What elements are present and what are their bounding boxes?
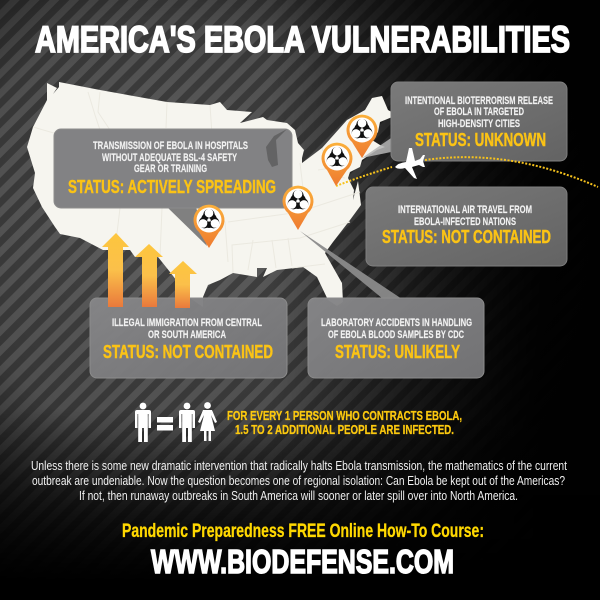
flight path and plane bbox=[336, 148, 598, 187]
panel: laboratory accidents: STATUS: UNLIKELY bbox=[335, 341, 460, 362]
panel: illegal immigration bbox=[90, 298, 287, 378]
panel: hospitals transmission: STATUS: ACTIVELY SPREADING bbox=[68, 176, 276, 197]
panel: hospitals transmission: TRANSMISSION OF EBOLA IN HOSPITALS bbox=[93, 140, 248, 152]
panel: illegal immigration: ILLEGAL IMMIGRATION FROM CENTRAL bbox=[112, 317, 262, 329]
icon: pin Texas bbox=[194, 205, 224, 248]
text block: course promo: Pandemic Preparedness FREE Online How-To Course: bbox=[122, 521, 484, 542]
text block: website: WWW.BIODEFENSE.COM bbox=[151, 543, 454, 580]
callout: transmission rate: FOR EVERY 1 PERSON WHO CONTRACTS EBOLA, bbox=[227, 408, 462, 423]
panel: laboratory accidents: OF EBOLA BLOOD SAMPLES BY CDC bbox=[328, 329, 464, 341]
icon: pin New York bbox=[346, 115, 378, 158]
panel: bioterrorism tail bbox=[362, 138, 391, 158]
callout: transmission rate bbox=[227, 408, 462, 437]
icon: person equals two people bbox=[135, 402, 217, 442]
icon: pin Washington bbox=[321, 143, 352, 186]
panel: hospitals transmission: WITHOUT ADEQUATE BSL-4 SAFETY bbox=[102, 152, 237, 164]
panel: hospitals transmission bbox=[54, 129, 292, 246]
callout: transmission rate: 1.5 TO 2 ADDITIONAL PEOPLE ARE INFECTED. bbox=[235, 422, 454, 437]
panel: laboratory accidents bbox=[300, 231, 484, 378]
text block: explanation bbox=[31, 458, 567, 503]
panel: air travel bbox=[366, 187, 567, 266]
panel: illegal immigration: STATUS: NOT CONTAINED bbox=[103, 341, 273, 362]
panel: bioterrorism release: STATUS: UNKNOWN bbox=[415, 129, 546, 150]
panel: laboratory accidents: LABORATORY ACCIDENTS IN HANDLING bbox=[321, 317, 472, 329]
panel: air travel: INTERNATIONAL AIR TRAVEL FROM bbox=[398, 204, 532, 216]
panel: hospitals transmission: GEAR OR TRAINING bbox=[134, 163, 207, 175]
map of the United States bbox=[27, 82, 397, 307]
panel: air travel: EBOLA-INFECTED NATIONS bbox=[414, 216, 516, 228]
arrows: immigration from the south bbox=[102, 233, 197, 308]
panel: illegal immigration: OR SOUTH AMERICA bbox=[148, 329, 226, 341]
panel: bioterrorism release: HIGH-DENSITY CITIES bbox=[438, 118, 520, 130]
panel: bioterrorism release: OF EBOLA IN TARGETED bbox=[434, 106, 524, 118]
icon: plane bbox=[395, 148, 425, 179]
panel: bioterrorism release bbox=[391, 82, 567, 161]
icon: pin Georgia bbox=[283, 186, 313, 230]
